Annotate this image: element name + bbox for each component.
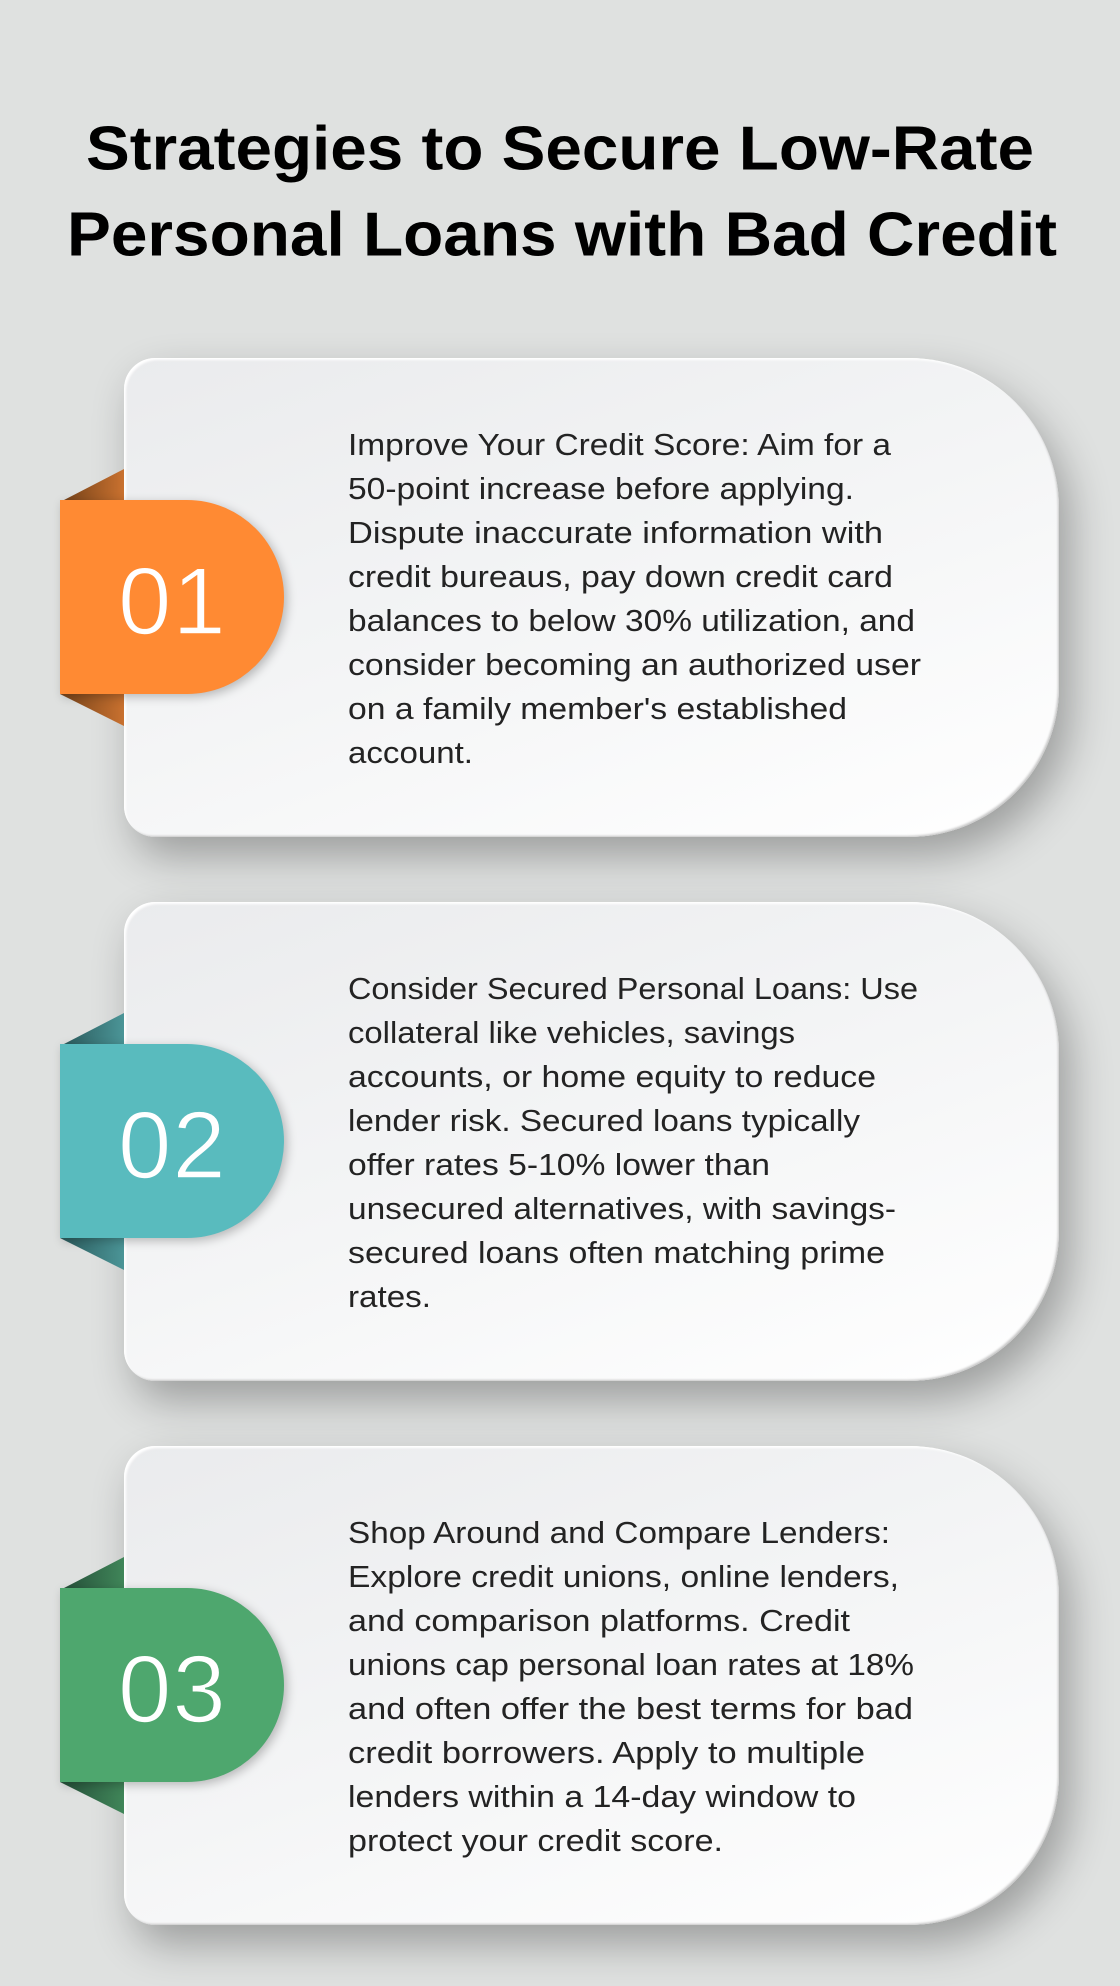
text: step 2 description: collateral like vehicles, savings [348,1015,795,1050]
text: step 3 description: protect your credit score. [348,1823,723,1858]
panel: step 3 card [124,1446,1059,1925]
text: step 2 description: unsecured alternatives, with savings- [348,1191,896,1226]
text: step 3 description: Explore credit unions, online lenders, [348,1559,899,1594]
text: step 1 description: account. [348,735,473,770]
panel: step 2 card [124,902,1059,1381]
text: step 3 description [348,1515,914,1858]
icon: step 2 ribbon folds [60,1013,124,1270]
text: step 3 description: unions cap personal loan rates at 18% [348,1647,914,1682]
panel: step 1 card [124,358,1059,837]
number: 01: 01 [118,548,227,655]
number: 02: 02 [118,1092,227,1199]
text: step 2 description [348,971,918,1314]
text: step 3 description: Shop Around and Compare Lenders: [348,1515,890,1550]
number: 03: 03 [118,1636,227,1743]
text: step 1 description: Improve Your Credit Score: Aim for a [348,427,892,462]
text: step 1 description: consider becoming an authorized user [348,647,921,682]
title: Strategies to Secure Low-Rate [86,114,1034,184]
badge: step 1 [60,500,284,694]
text: step 1 description: 50-point increase before applying. [348,471,854,506]
text: step 2 description: Consider Secured Personal Loans: Use [348,971,918,1006]
text: step 1 description [348,427,921,770]
text: step 1 description: Dispute inaccurate information with [348,515,883,550]
text: step 2 description: rates. [348,1279,431,1314]
badge: step 2 [60,1044,284,1238]
text: step 1 description: on a family member's established [348,691,847,726]
step 1: improve credit score [58,354,1093,879]
icon: step 3 ribbon folds [60,1557,124,1814]
text: step 1 description: balances to below 30% utilization, and [348,603,915,638]
badge: step 3 [60,1588,284,1782]
text: step 1 description: credit bureaus, pay down credit card [348,559,893,594]
step 3: compare lenders [58,1442,1093,1967]
text: step 2 description: lender risk. Secured loans typically [348,1103,861,1138]
text: step 3 description: and comparison platforms. Credit [348,1603,850,1638]
icon: step 1 ribbon folds [60,469,124,726]
text: step 2 description: offer rates 5-10% lower than [348,1147,770,1182]
title: Personal Loans with Bad Credit [67,200,1057,270]
text: step 2 description: accounts, or home equity to reduce [348,1059,876,1094]
text: step 3 description: lenders within a 14-day window to [348,1779,856,1814]
text: step 3 description: credit borrowers. Apply to multiple [348,1735,865,1770]
text: step 3 description: and often offer the best terms for bad [348,1691,913,1726]
step 2: secured personal loans [58,898,1093,1423]
title [67,114,1057,270]
text: step 2 description: secured loans often matching prime [348,1235,885,1270]
